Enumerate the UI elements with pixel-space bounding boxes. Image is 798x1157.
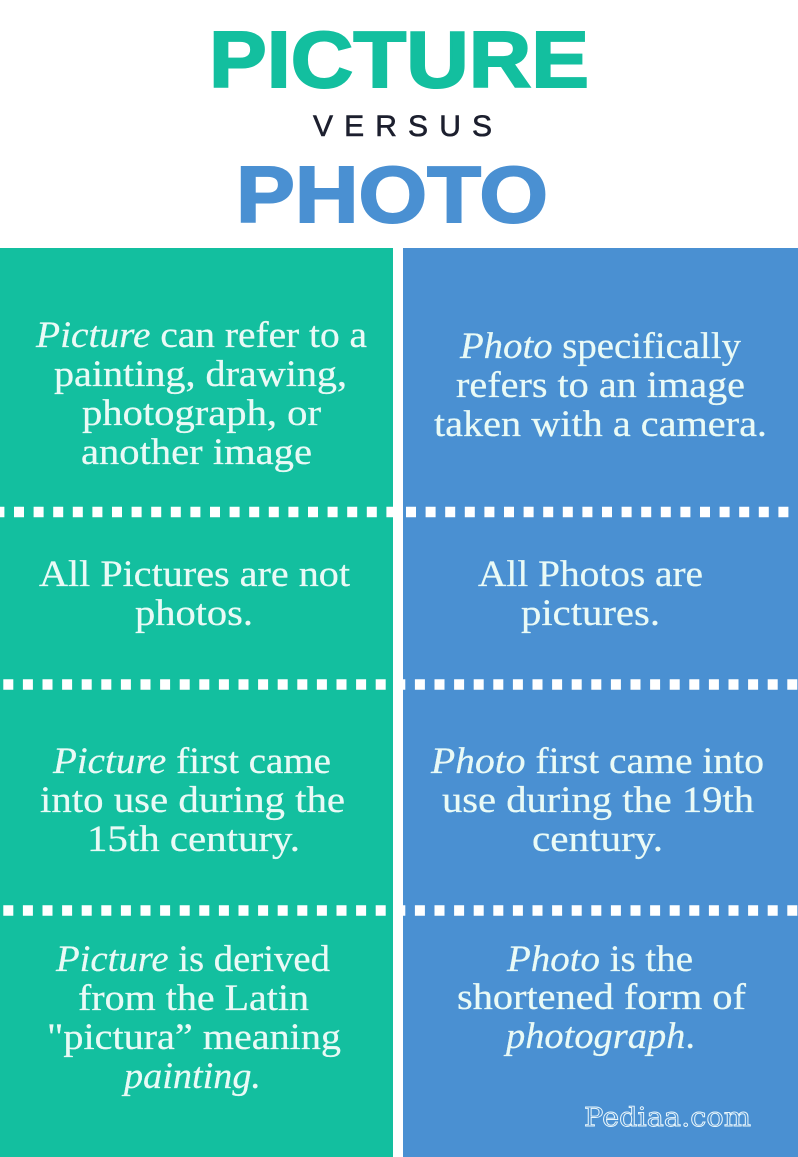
- text: all photos are pictures: [478, 553, 703, 633]
- text: photo origin: photograph.: [503, 1015, 695, 1056]
- text: photo definition: [434, 325, 767, 444]
- text: photo origin: [457, 938, 747, 1056]
- title: PICTURE: PICTURE: [209, 15, 589, 104]
- text: all photos are pictures: All Photos are: [478, 553, 703, 594]
- text: picture origin: painting.: [121, 1055, 261, 1096]
- text: picture definition: [35, 314, 367, 472]
- text: picture origin: Picture is derived: [55, 938, 330, 979]
- panel: photo column: [403, 248, 798, 1157]
- text: photo first use: use during the 19th: [442, 779, 754, 820]
- text: all pictures are not photos: [39, 553, 350, 633]
- text: picture definition: photograph, or: [82, 392, 321, 433]
- text: picture origin: from the Latin: [78, 977, 309, 1018]
- logo: Pediaa.com: Pediaa.com: [584, 1103, 751, 1133]
- text: picture first use: 15th century.: [87, 818, 300, 859]
- panel: picture column: [0, 248, 393, 1157]
- text: picture first use: Picture first came: [52, 740, 331, 781]
- text: picture origin: "pictura” meaning: [47, 1016, 341, 1057]
- subtitle: VERSUS: VERSUS: [313, 110, 492, 143]
- text: picture first use: into use during the: [40, 779, 345, 820]
- text: picture origin: [47, 938, 341, 1096]
- text: photo definition: taken with a camera.: [434, 403, 767, 444]
- text: photo first use: [430, 740, 764, 859]
- text: picture definition: painting, drawing,: [54, 353, 347, 394]
- title: PHOTO: PHOTO: [236, 150, 548, 239]
- text: photo first use: Photo first came into: [430, 740, 764, 781]
- text: photo definition: Photo specifically: [459, 325, 742, 366]
- text: picture first use: [40, 740, 345, 859]
- text: picture definition: another image: [81, 431, 312, 472]
- text: picture definition: Picture can refer to a: [35, 314, 367, 355]
- text: all pictures are not photos: All Pictures are not: [39, 553, 350, 594]
- text: photo first use: century.: [532, 818, 663, 859]
- text: all pictures are not photos: photos.: [135, 592, 253, 633]
- text: photo definition: refers to an image: [456, 364, 745, 405]
- text: photo origin: Photo is the: [506, 938, 693, 979]
- text: all photos are pictures: pictures.: [521, 592, 660, 633]
- text: photo origin: shortened form of: [457, 976, 747, 1017]
